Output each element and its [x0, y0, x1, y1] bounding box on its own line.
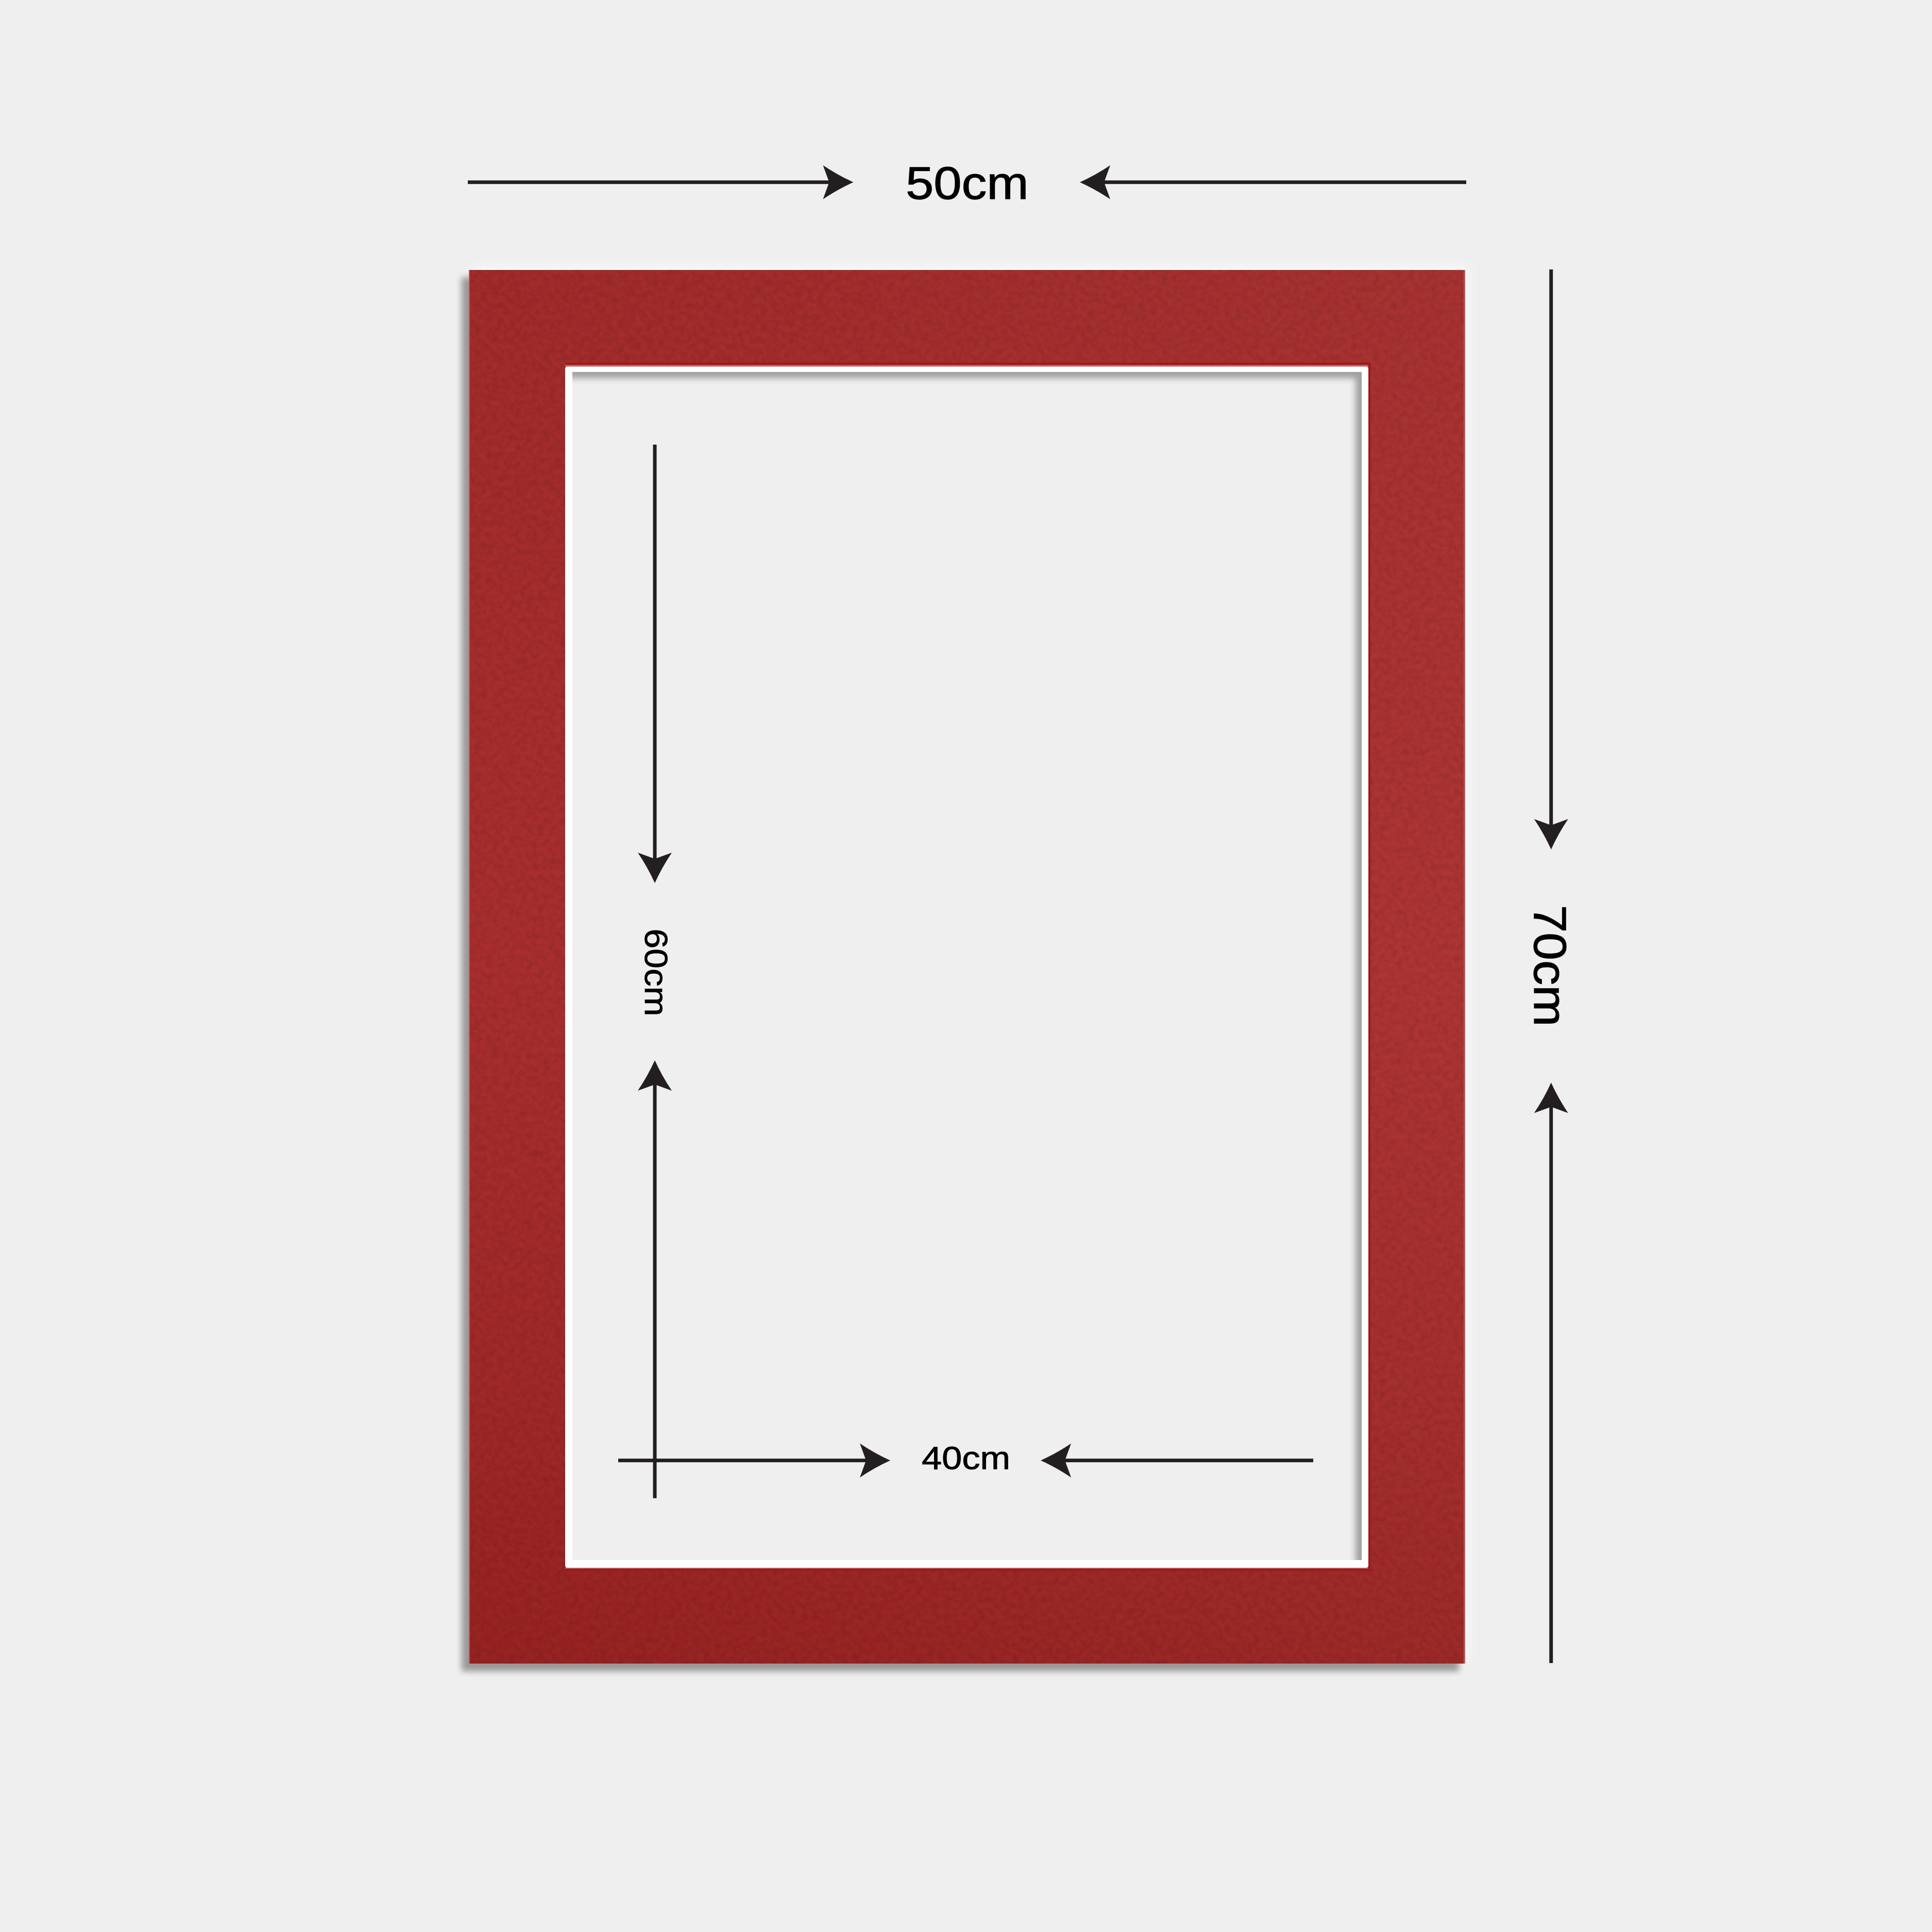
dimension: inner width 40cm [618, 1440, 1313, 1478]
arrow: right side pointing down [1534, 269, 1568, 850]
dimension: outer height 70cm [1524, 269, 1576, 1663]
arrow: top left pointing right [468, 165, 853, 199]
arrow: right side pointing up [1534, 1082, 1568, 1663]
arrow: inner pointing down [638, 445, 672, 883]
inner shadow: top and right [572, 372, 1362, 1560]
label: 40cm: 40cm [922, 1440, 1010, 1477]
arrow: top right pointing left [1080, 165, 1466, 199]
white bevel of opening [565, 367, 1368, 1568]
frame highlight glow [473, 266, 1469, 1659]
inner window [572, 372, 1362, 1560]
opening dark cut line [565, 363, 1370, 1571]
frame paper grain [469, 270, 1465, 1664]
dimension: outer width 50cm [468, 157, 1466, 209]
frame board [469, 270, 1465, 1664]
opening pink bevel line [565, 365, 1368, 1569]
frame right edge [1464, 270, 1465, 1664]
frame side tone [469, 270, 1465, 1664]
arrow: bottom left pointing right [618, 1444, 890, 1478]
panel: red mount frame [462, 266, 1469, 1671]
arrow: bottom right pointing left [1041, 1444, 1313, 1478]
label: 70cm: 70cm [1524, 905, 1576, 1027]
label: 50cm: 50cm [906, 157, 1028, 209]
dimension: inner height 60cm [638, 445, 673, 1498]
frame left edge [469, 270, 470, 1664]
label: 60cm: 60cm [638, 928, 673, 1016]
arrow: inner pointing up [638, 1060, 672, 1498]
frame drop shadow [462, 277, 1459, 1671]
